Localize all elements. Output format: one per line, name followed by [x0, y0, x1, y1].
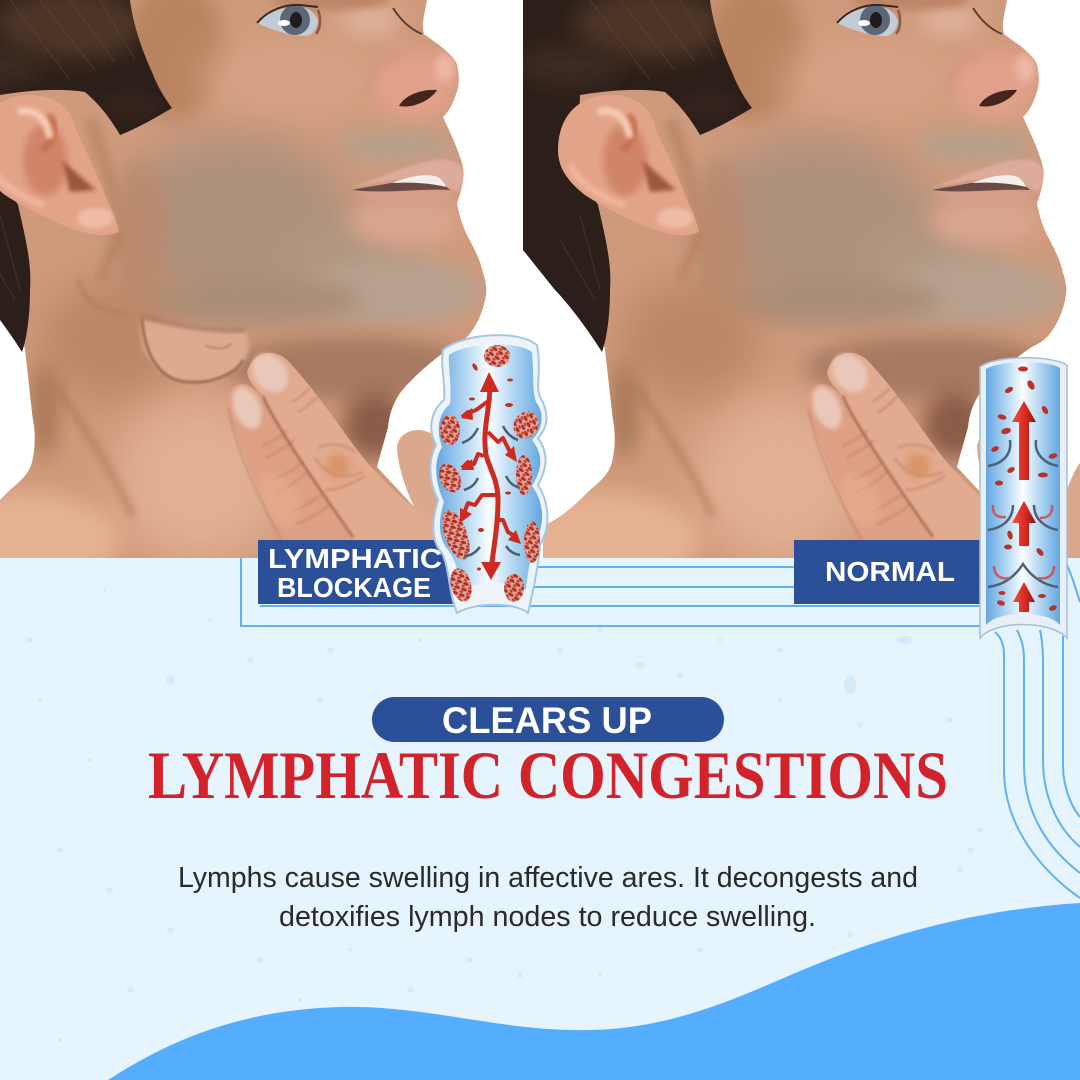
- illustration: blocked lymph vessel: [430, 335, 547, 613]
- photo: normal neck: [500, 0, 1080, 588]
- label: normal: [794, 540, 984, 604]
- valves: [988, 440, 1058, 587]
- branching red flow arrows: [462, 385, 517, 570]
- badge: clears up: [372, 697, 724, 742]
- cell clumps: [435, 345, 543, 604]
- label: lymphatic blockage: BLOCKAGE: [277, 572, 431, 603]
- heading: LYMPHATIC CONGESTIONS: [148, 737, 948, 813]
- label: normal: NORMAL: [825, 556, 955, 587]
- body text: Lymphs cause swelling in affective ares. It decongests and: [178, 862, 918, 894]
- panel: lower section background: [0, 558, 1080, 1080]
- badge: clears up: CLEARS UP: [442, 700, 652, 741]
- photo: lymphatic blockage neck: [0, 0, 486, 588]
- panel: photo background: [0, 0, 1080, 558]
- body text: [178, 862, 918, 933]
- small side flow arrows: [993, 505, 1054, 578]
- label: lymphatic blockage: [258, 540, 454, 604]
- valves: [462, 426, 520, 556]
- swollen lymph node lump: [78, 280, 249, 383]
- body text: detoxifies lymph nodes to reduce swelling.: [279, 901, 816, 933]
- red upward flow arrows: [1012, 401, 1036, 612]
- decorative wave: [108, 903, 1080, 1080]
- speckle texture: [27, 588, 983, 1042]
- label: lymphatic blockage: LYMPHATIC: [268, 543, 442, 574]
- illustration: normal lymph vessel: [980, 358, 1067, 638]
